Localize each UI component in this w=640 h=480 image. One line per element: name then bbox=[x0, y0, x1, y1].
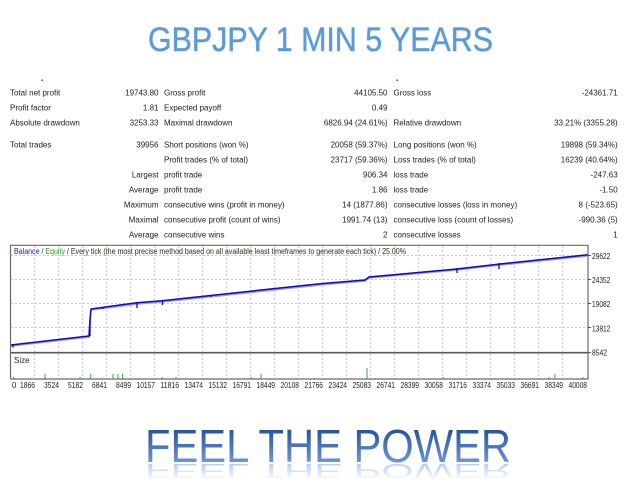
row: profit factor: 0.49 bbox=[372, 104, 388, 112]
row: average trade: Average bbox=[129, 186, 159, 194]
bottom axis labels bbox=[12, 381, 587, 390]
row: total net profit: Gross loss bbox=[394, 88, 431, 98]
size bars bbox=[14, 368, 583, 378]
bottom axis labels: 33374 bbox=[472, 381, 492, 390]
row: drawdown: Maximal drawdown bbox=[164, 118, 232, 128]
row: average trade: profit trade bbox=[164, 186, 203, 194]
header marks bbox=[42, 80, 398, 81]
right axis labels: 8542 bbox=[592, 348, 607, 358]
row: profit trades: Loss trades (% of total) bbox=[394, 156, 476, 164]
row: maximum consecutive: consecutive losses (loss in money) bbox=[394, 200, 517, 210]
row: profit factor bbox=[10, 104, 388, 112]
row: total net profit: 44105.50 bbox=[354, 88, 388, 98]
equity curve bbox=[11, 255, 588, 348]
title: GBPJPY 1 MIN 5 YEARS bbox=[148, 21, 493, 59]
row: profit factor: 1.81 bbox=[143, 104, 159, 112]
right axis labels: 19082 bbox=[592, 300, 610, 309]
bottom axis labels: 18449 bbox=[256, 381, 275, 390]
chart bbox=[10, 245, 610, 390]
bottom axis labels: 13474 bbox=[184, 381, 204, 390]
bottom axis labels: 5182 bbox=[68, 381, 83, 390]
row: maximal consecutive: 1991.74 (13) bbox=[342, 216, 388, 224]
row: total trades: Total trades bbox=[10, 140, 51, 150]
row: total net profit: 19743.80 bbox=[125, 88, 159, 98]
row: average trade bbox=[129, 186, 618, 194]
right axis labels: 29622 bbox=[592, 252, 610, 261]
row: total net profit: Gross profit bbox=[164, 88, 206, 98]
row: drawdown: 33.21% (3355.28) bbox=[554, 118, 618, 128]
bottom axis labels: 1866 bbox=[20, 381, 35, 390]
row: average trade: 1.86 bbox=[372, 186, 388, 194]
row: average consecutive: 1 bbox=[613, 230, 618, 240]
row: total trades: 39956 bbox=[136, 140, 159, 150]
row: average consecutive: 2 bbox=[383, 230, 388, 240]
row: total net profit bbox=[10, 88, 618, 98]
row: profit trades: 16239 (40.64%) bbox=[561, 156, 618, 164]
bottom axis labels: 36691 bbox=[520, 381, 539, 390]
row: average trade: -1.50 bbox=[599, 186, 618, 194]
row: largest trade bbox=[132, 170, 618, 180]
row: largest trade: 906.34 bbox=[363, 170, 388, 180]
right axis labels bbox=[592, 252, 610, 358]
bottom axis labels: 23424 bbox=[328, 381, 348, 390]
row: drawdown: 6826.94 (24.61%) bbox=[324, 118, 388, 128]
slogan: FEEL THE POWER bbox=[145, 420, 511, 472]
row: maximal consecutive bbox=[129, 216, 618, 224]
row: maximum consecutive: 14 (1877.86) bbox=[342, 200, 388, 210]
bottom axis labels: 8499 bbox=[116, 381, 131, 390]
row: profit factor: Profit factor bbox=[10, 104, 51, 112]
bottom axis labels: 20108 bbox=[280, 381, 299, 390]
bottom axis labels: 3524 bbox=[44, 381, 60, 390]
bottom axis labels: 6841 bbox=[92, 381, 107, 390]
right axis labels: 13812 bbox=[592, 324, 610, 334]
row: drawdown: 3253.33 bbox=[130, 118, 159, 128]
size panel label: Size bbox=[14, 356, 30, 365]
bottom axis labels: 15132 bbox=[208, 381, 227, 390]
row: maximal consecutive: Maximal bbox=[129, 216, 159, 224]
title: GBPJPY 1 MIN 5 YEARS bbox=[148, 22, 493, 60]
row: maximal consecutive: consecutive profit (count of wins) bbox=[164, 216, 281, 224]
bottom axis labels: 25083 bbox=[352, 381, 371, 390]
chart frame bbox=[10, 245, 591, 379]
row: average consecutive: consecutive wins bbox=[164, 230, 224, 240]
row: drawdown bbox=[10, 118, 618, 128]
row: maximum consecutive: consecutive wins (profit in money) bbox=[164, 200, 285, 210]
bottom axis labels: 26741 bbox=[376, 381, 395, 390]
row: average consecutive: consecutive losses bbox=[394, 230, 461, 240]
chart legend: Balance / Equity / Every tick (the most precise method based on all available least timeframes to generate each tick) / 25.00% bbox=[14, 247, 406, 256]
row: profit trades: 23717 (59.36%) bbox=[331, 156, 388, 164]
bottom axis labels: 10157 bbox=[136, 381, 155, 390]
row: average consecutive: Average bbox=[129, 230, 159, 240]
row: maximum consecutive bbox=[124, 200, 618, 210]
bottom axis labels: 35033 bbox=[496, 381, 515, 390]
row: total trades: Short positions (won %) bbox=[164, 140, 249, 150]
bottom axis labels: 28399 bbox=[400, 381, 419, 390]
row: drawdown: Relative drawdown bbox=[394, 118, 461, 128]
row: maximal consecutive: consecutive loss (count of losses) bbox=[394, 216, 513, 224]
bottom axis labels: 16791 bbox=[232, 381, 251, 390]
row: maximum consecutive: 8 (-523.65) bbox=[579, 200, 618, 210]
row: total trades bbox=[10, 140, 618, 150]
row: largest trade: Largest bbox=[132, 170, 159, 180]
row: profit trades bbox=[164, 156, 618, 164]
row: average trade: loss trade bbox=[394, 186, 429, 194]
row: average consecutive bbox=[129, 230, 618, 240]
row: largest trade: loss trade bbox=[394, 170, 429, 180]
row: largest trade: -247.63 bbox=[591, 170, 618, 180]
row: profit factor: Expected payoff bbox=[164, 104, 222, 112]
bottom axis labels: 31716 bbox=[448, 381, 467, 390]
bottom axis labels: 30058 bbox=[424, 381, 443, 390]
row: total net profit: -24361.71 bbox=[582, 88, 618, 98]
row: total trades: 19898 (59.34%) bbox=[561, 140, 618, 150]
bottom axis labels: 0 bbox=[12, 381, 17, 390]
row: total net profit: Total net profit bbox=[10, 88, 61, 98]
bottom axis labels: 40008 bbox=[568, 381, 587, 390]
row: maximum consecutive: Maximum bbox=[124, 200, 159, 210]
row: maximal consecutive: -990.36 (5) bbox=[579, 216, 618, 224]
row: profit trades: Profit trades (% of total) bbox=[164, 156, 248, 164]
row: largest trade: profit trade bbox=[164, 170, 203, 180]
bottom axis labels: 38349 bbox=[544, 381, 563, 390]
bottom axis labels: 21766 bbox=[304, 381, 323, 390]
right axis labels: 24352 bbox=[592, 276, 610, 285]
statistics table bbox=[10, 80, 618, 240]
row: total trades: 20058 (59.37%) bbox=[331, 140, 388, 150]
row: total trades: Long positions (won %) bbox=[394, 140, 477, 150]
row: drawdown: Absolute drawdown bbox=[10, 118, 80, 128]
bottom axis labels: 11816 bbox=[160, 381, 179, 390]
